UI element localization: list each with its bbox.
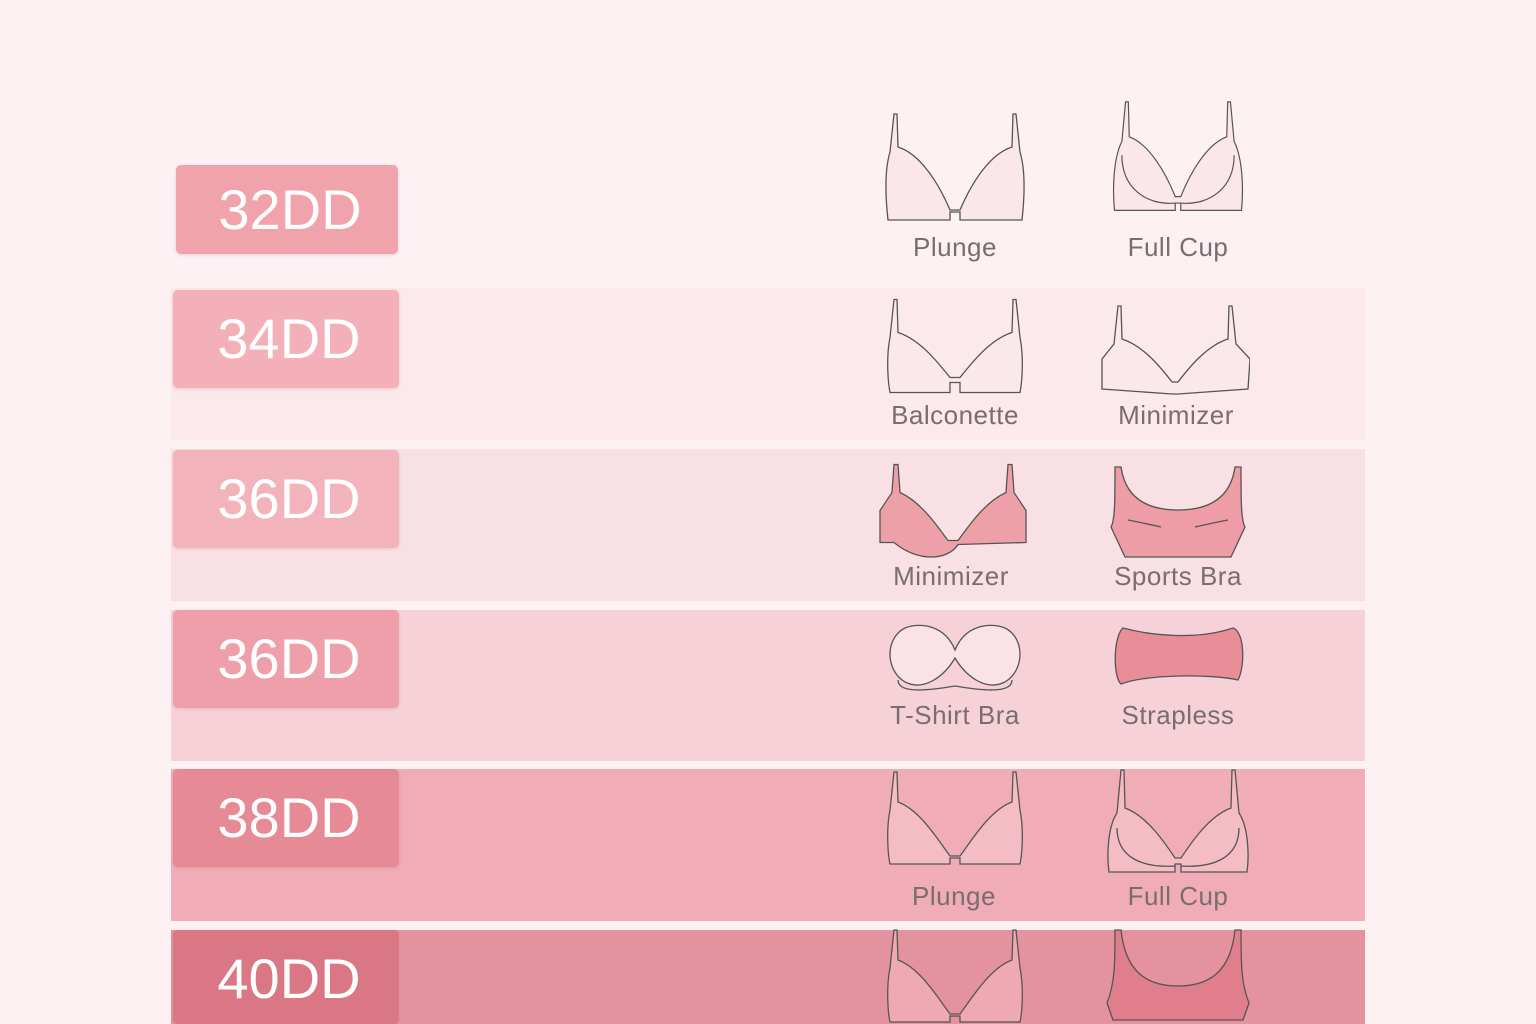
badge: 34DD: 34DD <box>217 307 361 370</box>
badge: 40DD <box>173 930 399 1024</box>
icon: plunge 32DD <box>885 113 1025 221</box>
icon: plunge 40DD <box>887 929 1023 1023</box>
badge: 36DD: 36DD <box>217 467 361 530</box>
label: T-Shirt Bra: T-Shirt Bra <box>890 700 1020 730</box>
band: 38DD row <box>171 769 1365 921</box>
badge: 36DD <box>173 450 399 548</box>
band: 36DD row <box>171 449 1365 601</box>
label: Minimizer: Minimizer <box>1118 400 1234 430</box>
label: Full Cup 38DD: Full Cup <box>1128 881 1228 911</box>
icon: sports bra <box>1110 466 1246 558</box>
icon: full cup 32DD <box>1112 101 1244 211</box>
badge: 32DD: 32DD <box>218 178 362 241</box>
icon: sports bra 40DD <box>1106 929 1250 1021</box>
icon: t-shirt bra <box>889 624 1021 691</box>
icon: strapless <box>1114 627 1244 685</box>
band: 40DD row <box>171 930 1365 1024</box>
label: Balconette: Balconette <box>891 400 1019 430</box>
label: Full Cup: Full Cup <box>1128 232 1228 262</box>
band: 36DD second row <box>171 610 1365 761</box>
label: Plunge 38DD: Plunge <box>912 881 996 911</box>
icon: minimizer 36DD (filled) <box>879 464 1027 558</box>
label: Sports Bra: Sports Bra <box>1114 561 1242 591</box>
badge: 36DD second <box>173 610 399 708</box>
icon: balconette <box>887 298 1023 394</box>
badge: 34DD <box>173 290 399 388</box>
badge: 32DD <box>176 165 398 254</box>
badge: 38DD <box>173 769 399 867</box>
icon: plunge 38DD <box>887 771 1023 865</box>
band: 34DD row <box>171 288 1365 440</box>
icon: full cup 38DD <box>1107 769 1249 873</box>
label: Minimizer 36DD: Minimizer <box>893 561 1009 591</box>
icon: minimizer 34DD <box>1101 305 1250 395</box>
label: Plunge: Plunge <box>913 232 997 262</box>
badge: 38DD: 38DD <box>217 786 361 849</box>
badge: 40DD: 40DD <box>217 947 361 1010</box>
badge: 36DD second: 36DD <box>217 627 361 690</box>
label: Strapless: Strapless <box>1122 700 1234 730</box>
